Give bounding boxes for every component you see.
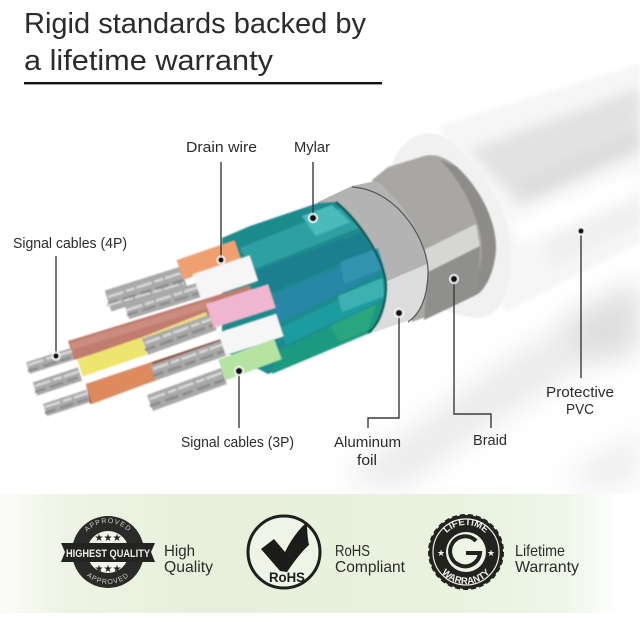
icon: highest quality badge: APPROVED <box>86 573 128 584</box>
icon: highest quality badge: ★★★ <box>95 533 121 544</box>
title <box>24 8 382 84</box>
label: RoHS compliant <box>335 543 406 576</box>
callout: signal cables 3P: Signal cables (3P) <box>181 435 294 451</box>
wire: dark salmon <box>28 285 255 371</box>
wire: yellow <box>35 312 214 392</box>
label: lifetime warranty: Warranty <box>515 559 579 576</box>
braid layer <box>372 155 496 322</box>
callout: braid <box>450 275 507 449</box>
icon: lifetime warranty badge: ★ <box>487 548 495 558</box>
label: high quality: High <box>164 543 195 560</box>
cable illustration <box>28 64 640 413</box>
icon: highest quality badge: APPROVED <box>85 518 130 532</box>
callout: aluminum foil: Aluminum <box>334 435 401 451</box>
callout: aluminum foil: foil <box>357 453 377 469</box>
wire: pink <box>210 296 272 316</box>
label: RoHS compliant: RoHS <box>335 543 370 560</box>
icon: RoHS check badge <box>248 516 320 588</box>
cable cast shadow <box>340 280 640 492</box>
callout: protective PVC: PVC <box>566 402 594 418</box>
icon: lifetime warranty badge: LIFETIME <box>442 518 490 533</box>
label: high quality: Quality <box>164 559 213 576</box>
callout: signal cables 3P <box>181 367 294 451</box>
callout: drain wire <box>186 140 257 264</box>
icon: lifetime warranty badge: WARRANTY <box>442 568 488 584</box>
certification band <box>4 494 600 613</box>
wire: white bottom <box>222 325 280 344</box>
wire: orange top <box>106 250 238 306</box>
callout: aluminum foil <box>334 309 403 469</box>
callout: mylar: Mylar <box>294 140 330 156</box>
icon: highest quality badge: ★★★ <box>95 564 121 575</box>
wire: brown orange <box>45 336 240 413</box>
label: lifetime warranty <box>515 543 579 576</box>
icon: lifetime warranty badge: ★ <box>437 548 445 558</box>
wire: white top <box>127 268 254 315</box>
callout: signal cables 4P <box>13 236 127 360</box>
callout: mylar <box>294 140 330 222</box>
icon: RoHS check badge: RoHS <box>269 569 305 585</box>
label: RoHS compliant: Compliant <box>335 559 406 576</box>
title: Rigid standards backed by <box>24 8 366 40</box>
mylar teal shielded wires <box>222 202 386 374</box>
callout: protective PVC: Protective <box>546 385 614 401</box>
icon: highest quality badge: HIGHEST QUALITY <box>66 548 151 560</box>
label: lifetime warranty: Lifetime <box>515 543 565 560</box>
callout: braid: Braid <box>473 433 507 449</box>
icon: lifetime warranty badge <box>428 514 504 590</box>
icon: highest quality badge <box>61 516 155 588</box>
title: a lifetime warranty <box>24 45 274 77</box>
callout: drain wire: Drain wire <box>186 140 257 156</box>
label: high quality <box>164 543 213 576</box>
inner wires <box>28 250 280 413</box>
callout: protective PVC <box>546 228 614 418</box>
aluminum foil layer <box>318 181 428 333</box>
callout: signal cables 4P: Signal cables (4P) <box>13 236 127 252</box>
wire: green <box>150 349 278 406</box>
protective PVC jacket <box>392 64 640 318</box>
